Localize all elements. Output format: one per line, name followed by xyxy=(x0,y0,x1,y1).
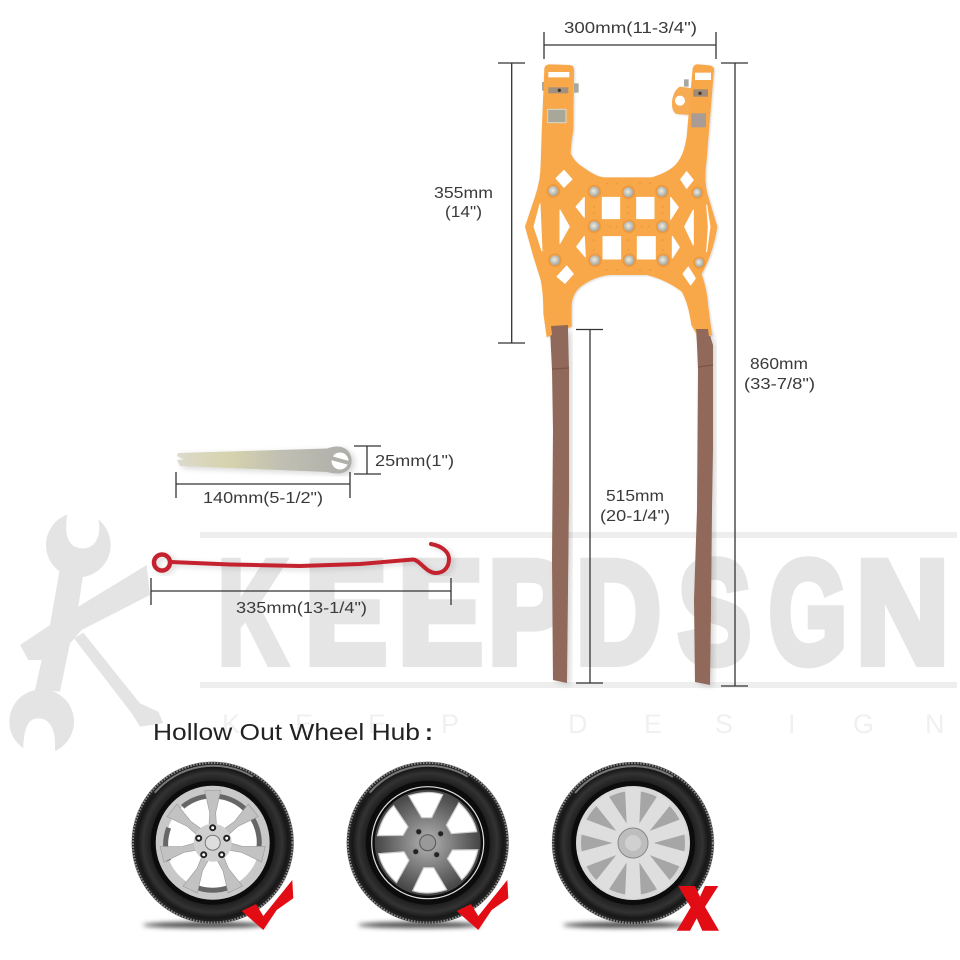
watermark: keep design subtitle: D xyxy=(568,709,588,739)
dimension: plate height xyxy=(434,63,525,343)
strap slots and metal plates xyxy=(542,72,711,127)
wrench tool xyxy=(177,446,352,474)
watermark: brand wordmark: E xyxy=(305,531,387,694)
heading: hollow out wheel hub: : xyxy=(425,719,433,745)
watermark: brand wordmark xyxy=(200,531,957,694)
plate studs xyxy=(593,182,664,271)
plate cut-outs xyxy=(534,170,710,285)
dimension: hook length: 335mm(13-1/4") xyxy=(236,600,367,617)
dimension: plate width: 300mm(11-3/4") xyxy=(564,20,697,37)
dimension: total length: 860mm xyxy=(750,356,808,373)
dimension: wrench length: 140mm(5-1/2") xyxy=(203,490,323,507)
dimension: strap length xyxy=(576,330,670,683)
brown strap right xyxy=(694,329,713,685)
dimension: strap length: 515mm xyxy=(606,488,664,505)
plate rivets xyxy=(547,185,705,268)
icon: red check xyxy=(242,880,293,930)
red hook tool xyxy=(154,544,449,573)
icon: red check xyxy=(457,880,508,930)
watermark: brand wordmark: D xyxy=(576,531,661,694)
brown strap left xyxy=(550,329,569,683)
watermark: wrench logo xyxy=(9,508,163,757)
dimension: wrench width: 25mm(1") xyxy=(375,453,454,470)
wheel 2: suitable xyxy=(347,762,509,930)
watermark: brand wordmark: G xyxy=(769,531,847,694)
watermark: keep design subtitle: S xyxy=(715,709,733,739)
watermark: brand wordmark: P xyxy=(488,531,568,694)
watermark: keep design subtitle: E xyxy=(368,709,386,739)
dimension: plate height: (14") xyxy=(445,204,482,221)
dimension: strap length: (20-1/4") xyxy=(600,508,670,525)
dimension: total length xyxy=(721,63,815,686)
dimension: wrench width xyxy=(354,446,454,474)
heading: hollow out wheel hub: Hollow Out Wheel Hub xyxy=(153,719,420,745)
wheel 3: not suitable xyxy=(552,762,719,931)
dimension: total length: (33-7/8") xyxy=(744,376,815,393)
watermark: keep design subtitle: I xyxy=(788,709,796,739)
watermark: keep design subtitle: G xyxy=(853,709,874,739)
icon: red cross xyxy=(677,886,719,931)
strap tops over plate xyxy=(551,325,710,345)
watermark: keep design subtitle: P xyxy=(441,709,459,739)
dimension: hook length xyxy=(151,578,451,617)
watermark: brand wordmark: S xyxy=(678,531,751,694)
dimension: wrench length xyxy=(176,472,350,507)
watermark: brand wordmark: K xyxy=(218,531,286,694)
watermark: keep design subtitle: N xyxy=(925,709,944,739)
wheel 1: suitable xyxy=(132,762,294,930)
orange traction plate xyxy=(525,64,717,341)
dimension: plate width xyxy=(544,20,716,59)
watermark: brand wordmark: N xyxy=(856,531,949,694)
watermark: keep design subtitle: K xyxy=(222,709,240,739)
watermark: keep design subtitle xyxy=(222,709,944,739)
dimension: plate height: 355mm xyxy=(434,185,493,202)
watermark: keep design subtitle: E xyxy=(644,709,662,739)
buckle loop right xyxy=(672,87,693,115)
watermark: keep design subtitle: E xyxy=(295,709,313,739)
watermark: brand wordmark: E xyxy=(398,531,483,694)
